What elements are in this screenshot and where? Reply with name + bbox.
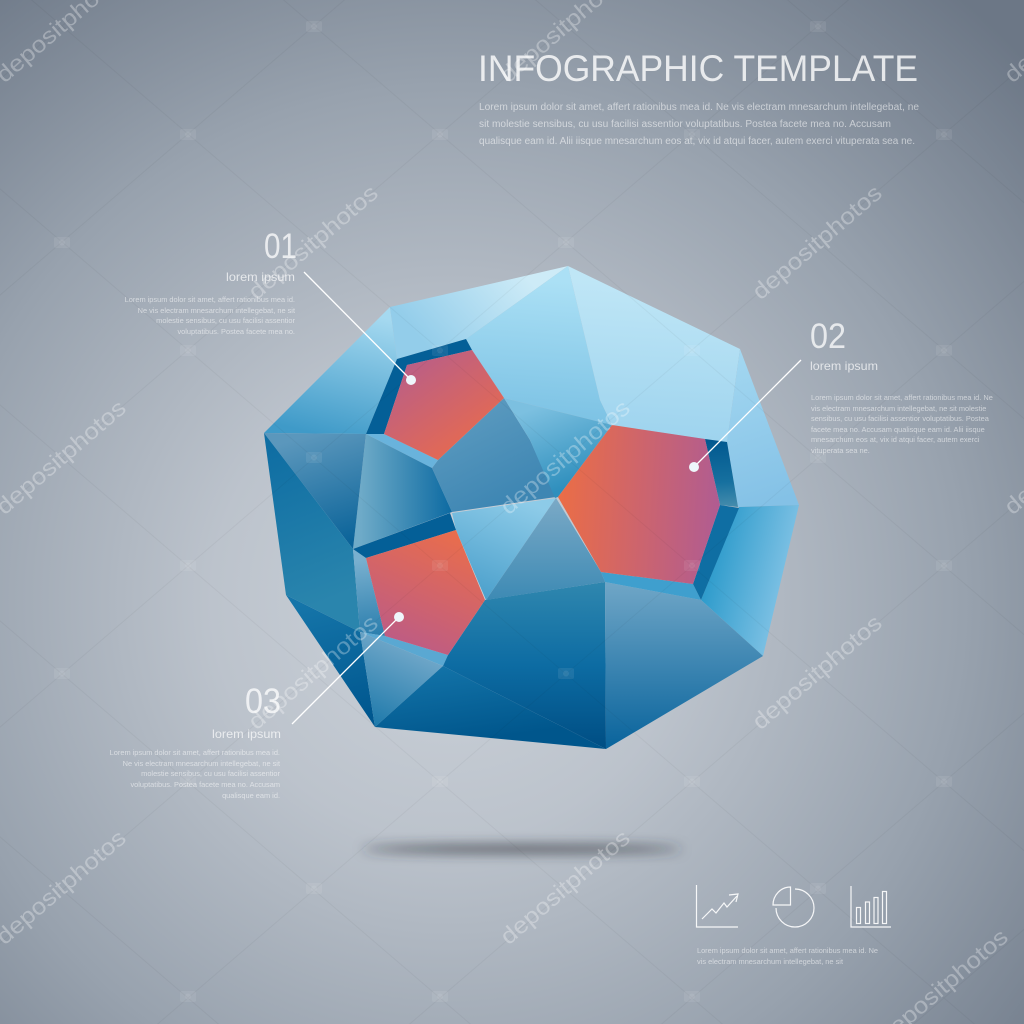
floor shadow	[362, 845, 682, 853]
heading 01: lorem ipsum	[226, 270, 295, 284]
facet: lower left band	[286, 595, 375, 727]
facet: far left	[264, 433, 360, 632]
watermark: depositphotos	[243, 179, 383, 305]
red pentagon 3	[366, 530, 485, 655]
body 03: molestie sensibus, cu usu facilisi assentior	[141, 769, 281, 778]
body 03	[110, 748, 281, 800]
body 02: sensibus, cu usu facilisi assentior voluptatibus. Postea	[811, 414, 990, 423]
leader line 03	[292, 612, 404, 724]
callout 02	[810, 317, 993, 455]
facet: centre right	[504, 398, 612, 498]
watermark: depositphotos	[747, 179, 887, 305]
body 02: facete mea no. Accusam qualisque eam id. Alii iisque	[811, 425, 985, 434]
facet: left	[264, 433, 366, 549]
body 02: vis electram mnesarchum intellegebat, ne sit molestie	[811, 404, 986, 413]
body 01: Lorem ipsum dolor sit amet, affert rationibus mea id.	[125, 295, 295, 304]
recess wall 2 lower	[693, 505, 739, 600]
leader line 01	[304, 272, 416, 385]
intro text: sit molestie sensibus, cu usu facilisi assentior voluptatibus. Postea facete mea no. Accusam	[479, 119, 891, 130]
facet: centre blue	[486, 498, 605, 600]
red pentagon 1	[384, 350, 504, 460]
facet: top	[390, 266, 568, 359]
heading 02: lorem ipsum	[810, 359, 878, 373]
callout 01	[125, 227, 297, 336]
facet: lower strip	[360, 632, 448, 666]
watermark: depositphotos	[747, 609, 887, 735]
body 02	[811, 393, 993, 455]
recess wall 1	[366, 339, 472, 434]
recess wall 2	[705, 439, 738, 507]
facet: small left	[353, 549, 385, 636]
facet: top right	[568, 266, 740, 442]
body 03: Lorem ipsum dolor sit amet, affert rationibus mea id.	[110, 748, 280, 757]
facet: inner left	[353, 434, 452, 549]
number 01: 01	[264, 227, 297, 266]
icon: pie chart	[773, 887, 814, 927]
body 03: qualisque eam id.	[222, 791, 280, 800]
facet: right	[727, 349, 799, 507]
title: INFOGRAPHIC TEMPLATE	[478, 48, 918, 89]
body 01: Ne vis electram mnesarchum intellegebat, ne sit	[138, 306, 295, 315]
number 02: 02	[810, 317, 846, 356]
number 03: 03	[245, 682, 281, 721]
facet: centre light	[452, 498, 556, 600]
body 01: voluptatibus. Postea facete mea no.	[177, 327, 295, 336]
caption: Lorem ipsum dolor sit amet, affert rationibus mea id. Ne	[697, 946, 878, 955]
facet: small lower	[360, 632, 443, 727]
body 03: voluptatibus. Postea facete mea no. Accusam	[130, 780, 280, 789]
heading 03: lorem ipsum	[212, 727, 281, 741]
intro text	[479, 102, 919, 147]
facet: centre	[432, 398, 556, 512]
facet: light strip	[366, 434, 438, 468]
facet: bottom	[375, 666, 606, 749]
facet: lower right	[701, 505, 799, 656]
icon: line chart	[696, 885, 738, 927]
facet: upper left	[264, 307, 397, 434]
body 02: vituperata sea ne.	[811, 446, 870, 455]
watermark: depositphotos	[495, 824, 635, 950]
body 02: mnesarchum eos at, vix id atqui facer, autem exerci	[811, 435, 980, 444]
leader line 02	[689, 360, 801, 472]
icon: bar chart	[851, 886, 891, 927]
watermark: depositphotos	[495, 394, 635, 520]
body 03: Ne vis electram mnesarchum intellegebat, ne sit	[123, 759, 280, 768]
callout 03	[110, 682, 281, 800]
intro text: Lorem ipsum dolor sit amet, affert rationibus mea id. Ne vis electram mnesarchum intellegebat, ne	[479, 102, 919, 113]
red hexagon 2	[558, 425, 720, 584]
polyhedron	[264, 266, 799, 749]
facet: bottom centre	[443, 582, 606, 749]
body 02: Lorem ipsum dolor sit amet, affert rationibus mea id. Ne	[811, 393, 993, 402]
caption: vis electram mnesarchum intellegebat, ne sit	[697, 957, 843, 966]
watermark: depositphotos	[243, 609, 383, 735]
recess wall 3	[353, 513, 456, 558]
facet: strip under hexagon	[601, 572, 701, 600]
facet: top centre	[466, 266, 612, 425]
facet: bottom right	[605, 582, 763, 749]
body 01: molestie sensibus, cu usu facilisi assentior	[156, 316, 296, 325]
body 01	[125, 295, 296, 336]
intro text: qualisque eam id. Alii iisque mnesarchum eos at, vix id atqui facer, autem exerci vituperata sea ne.	[479, 136, 915, 147]
caption	[697, 946, 878, 966]
